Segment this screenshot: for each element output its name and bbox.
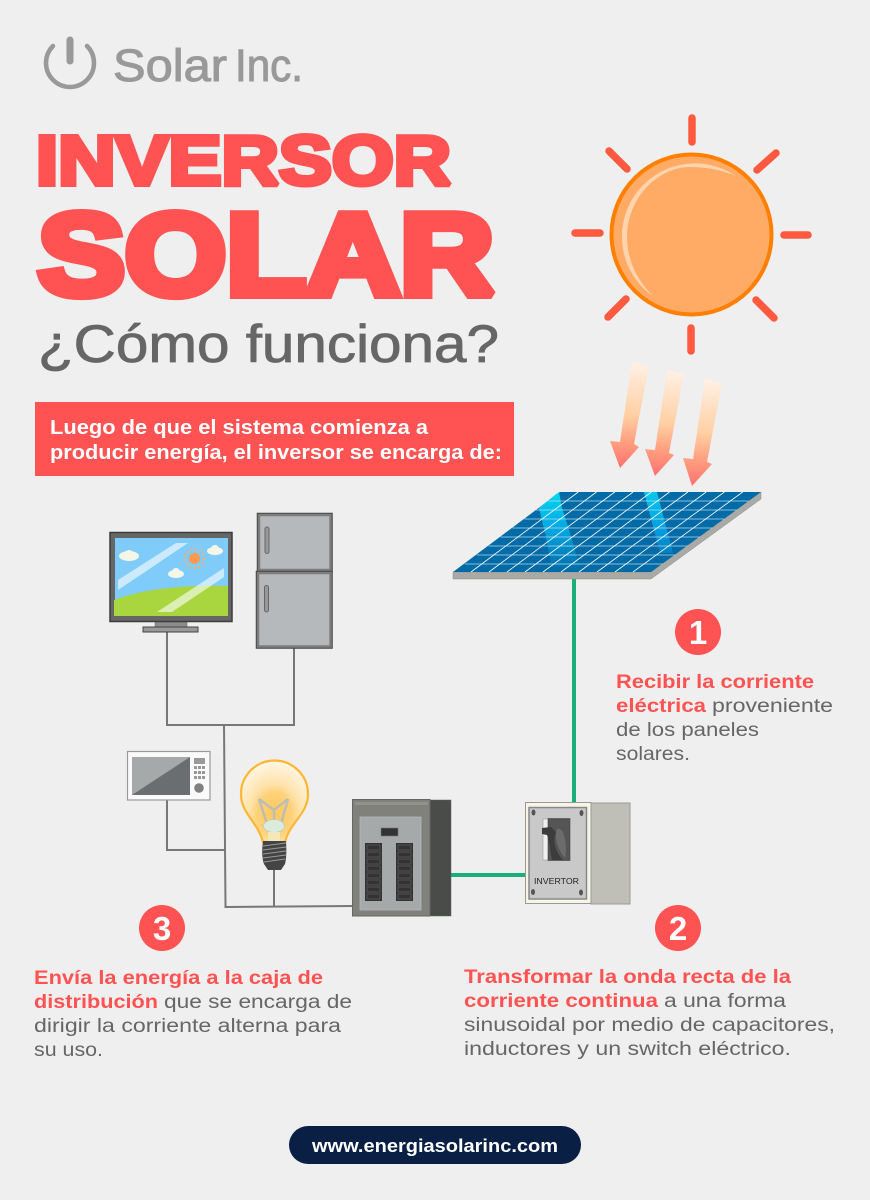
sun disc [612, 154, 772, 314]
inverter [526, 802, 630, 904]
title line: INVERSOR: INVERSOR [36, 122, 451, 200]
distribution box [352, 800, 451, 916]
panel grid [465, 492, 749, 572]
microwave window [132, 757, 190, 795]
panel frame [453, 492, 761, 579]
step 1 badge: 1 [689, 614, 707, 651]
bulb filament [259, 799, 288, 824]
step 2 badge [655, 905, 701, 951]
step 2 [464, 905, 835, 1060]
title line: SOLAR: SOLAR [38, 190, 494, 320]
fridge handles [265, 527, 269, 554]
green wires [451, 579, 574, 875]
fridge upper door [258, 514, 332, 572]
tv screen [115, 538, 228, 616]
arrow 2 [645, 370, 684, 476]
bulb glass [241, 760, 308, 842]
step 1 text: solares. [616, 744, 690, 765]
subtitle: ¿Cómo funciona? [38, 315, 499, 374]
step 2 text: sinusoidal por medio de capacitores, [464, 1015, 835, 1036]
inverter screws [531, 810, 584, 896]
step 3 badge: 3 [153, 910, 171, 947]
bulb screw base [262, 841, 286, 870]
logo wordmark: Inc. [235, 40, 303, 91]
solar panel [453, 492, 761, 579]
step 2 text: a una forma [664, 991, 787, 1012]
step 3 badge [139, 905, 185, 951]
sun rays [575, 118, 808, 351]
inverter front [526, 802, 591, 904]
microwave keypad [194, 758, 205, 793]
logo wordmark: Solar [113, 40, 227, 91]
light bulb [241, 760, 308, 870]
sun light arrows [610, 362, 722, 486]
step 1 text: proveniente [712, 696, 833, 717]
fridge lower door [256, 572, 332, 648]
step 1 badge [675, 609, 721, 655]
inverter label: INVERTOR [534, 876, 579, 886]
refrigerator [256, 514, 332, 648]
step 3 text: distribución [34, 992, 158, 1013]
logo: Solar Inc. [46, 40, 303, 91]
box front [352, 800, 430, 916]
inverter plate [529, 808, 586, 899]
footer URL pill: www.energiasolarinc.com [311, 1136, 558, 1156]
step 3 text: dirigir la corriente alterna para [34, 1016, 342, 1037]
step 3 text: su uso. [34, 1040, 103, 1061]
icon: sun [575, 118, 808, 351]
step 1 text [616, 672, 833, 765]
intro banner: producir energía, el inversor se encarga de: [50, 442, 502, 464]
arrow 3 [683, 379, 722, 486]
step 2 text [464, 967, 835, 1060]
breaker columns [365, 843, 382, 901]
intro banner: Luego de que el sistema comienza a [50, 417, 429, 439]
gray wires [167, 632, 353, 907]
inverter switch [543, 819, 549, 860]
inverter side [591, 803, 630, 904]
step 2 text: inductores y un switch eléctrico. [464, 1039, 791, 1060]
tv sun [189, 553, 200, 564]
step 1 [616, 609, 833, 765]
arrow 1 [610, 362, 649, 468]
step 1 text: eléctrica [616, 696, 706, 717]
box inner panel [360, 817, 421, 910]
step 1 text: Recibir la corriente [616, 672, 814, 693]
step 3 text: que se encarga de [164, 992, 352, 1013]
step 1 text: de los paneles [616, 720, 759, 741]
sun highlight [622, 163, 736, 297]
icon: power symbol [46, 40, 94, 87]
step 3 text [34, 968, 352, 1061]
footer URL pill [289, 1126, 581, 1164]
panel reflections [539, 492, 581, 572]
box main switch [381, 828, 398, 836]
step 2 badge: 2 [669, 910, 687, 947]
microwave [128, 752, 210, 800]
tv bezel [110, 532, 232, 622]
title [36, 122, 499, 374]
tv clouds [119, 545, 223, 578]
intro banner [35, 402, 514, 476]
step 2 text: corriente continua [464, 991, 659, 1012]
microwave body [128, 752, 210, 800]
step 3 text: Envía la energía a la caja de [34, 968, 323, 989]
box side [430, 800, 451, 916]
panel surface [453, 492, 761, 572]
step 3 [34, 905, 352, 1061]
television [110, 532, 232, 632]
logo wordmark [113, 40, 303, 91]
step 2 text: Transformar la onda recta de la [464, 967, 791, 988]
tv stand [155, 621, 187, 627]
